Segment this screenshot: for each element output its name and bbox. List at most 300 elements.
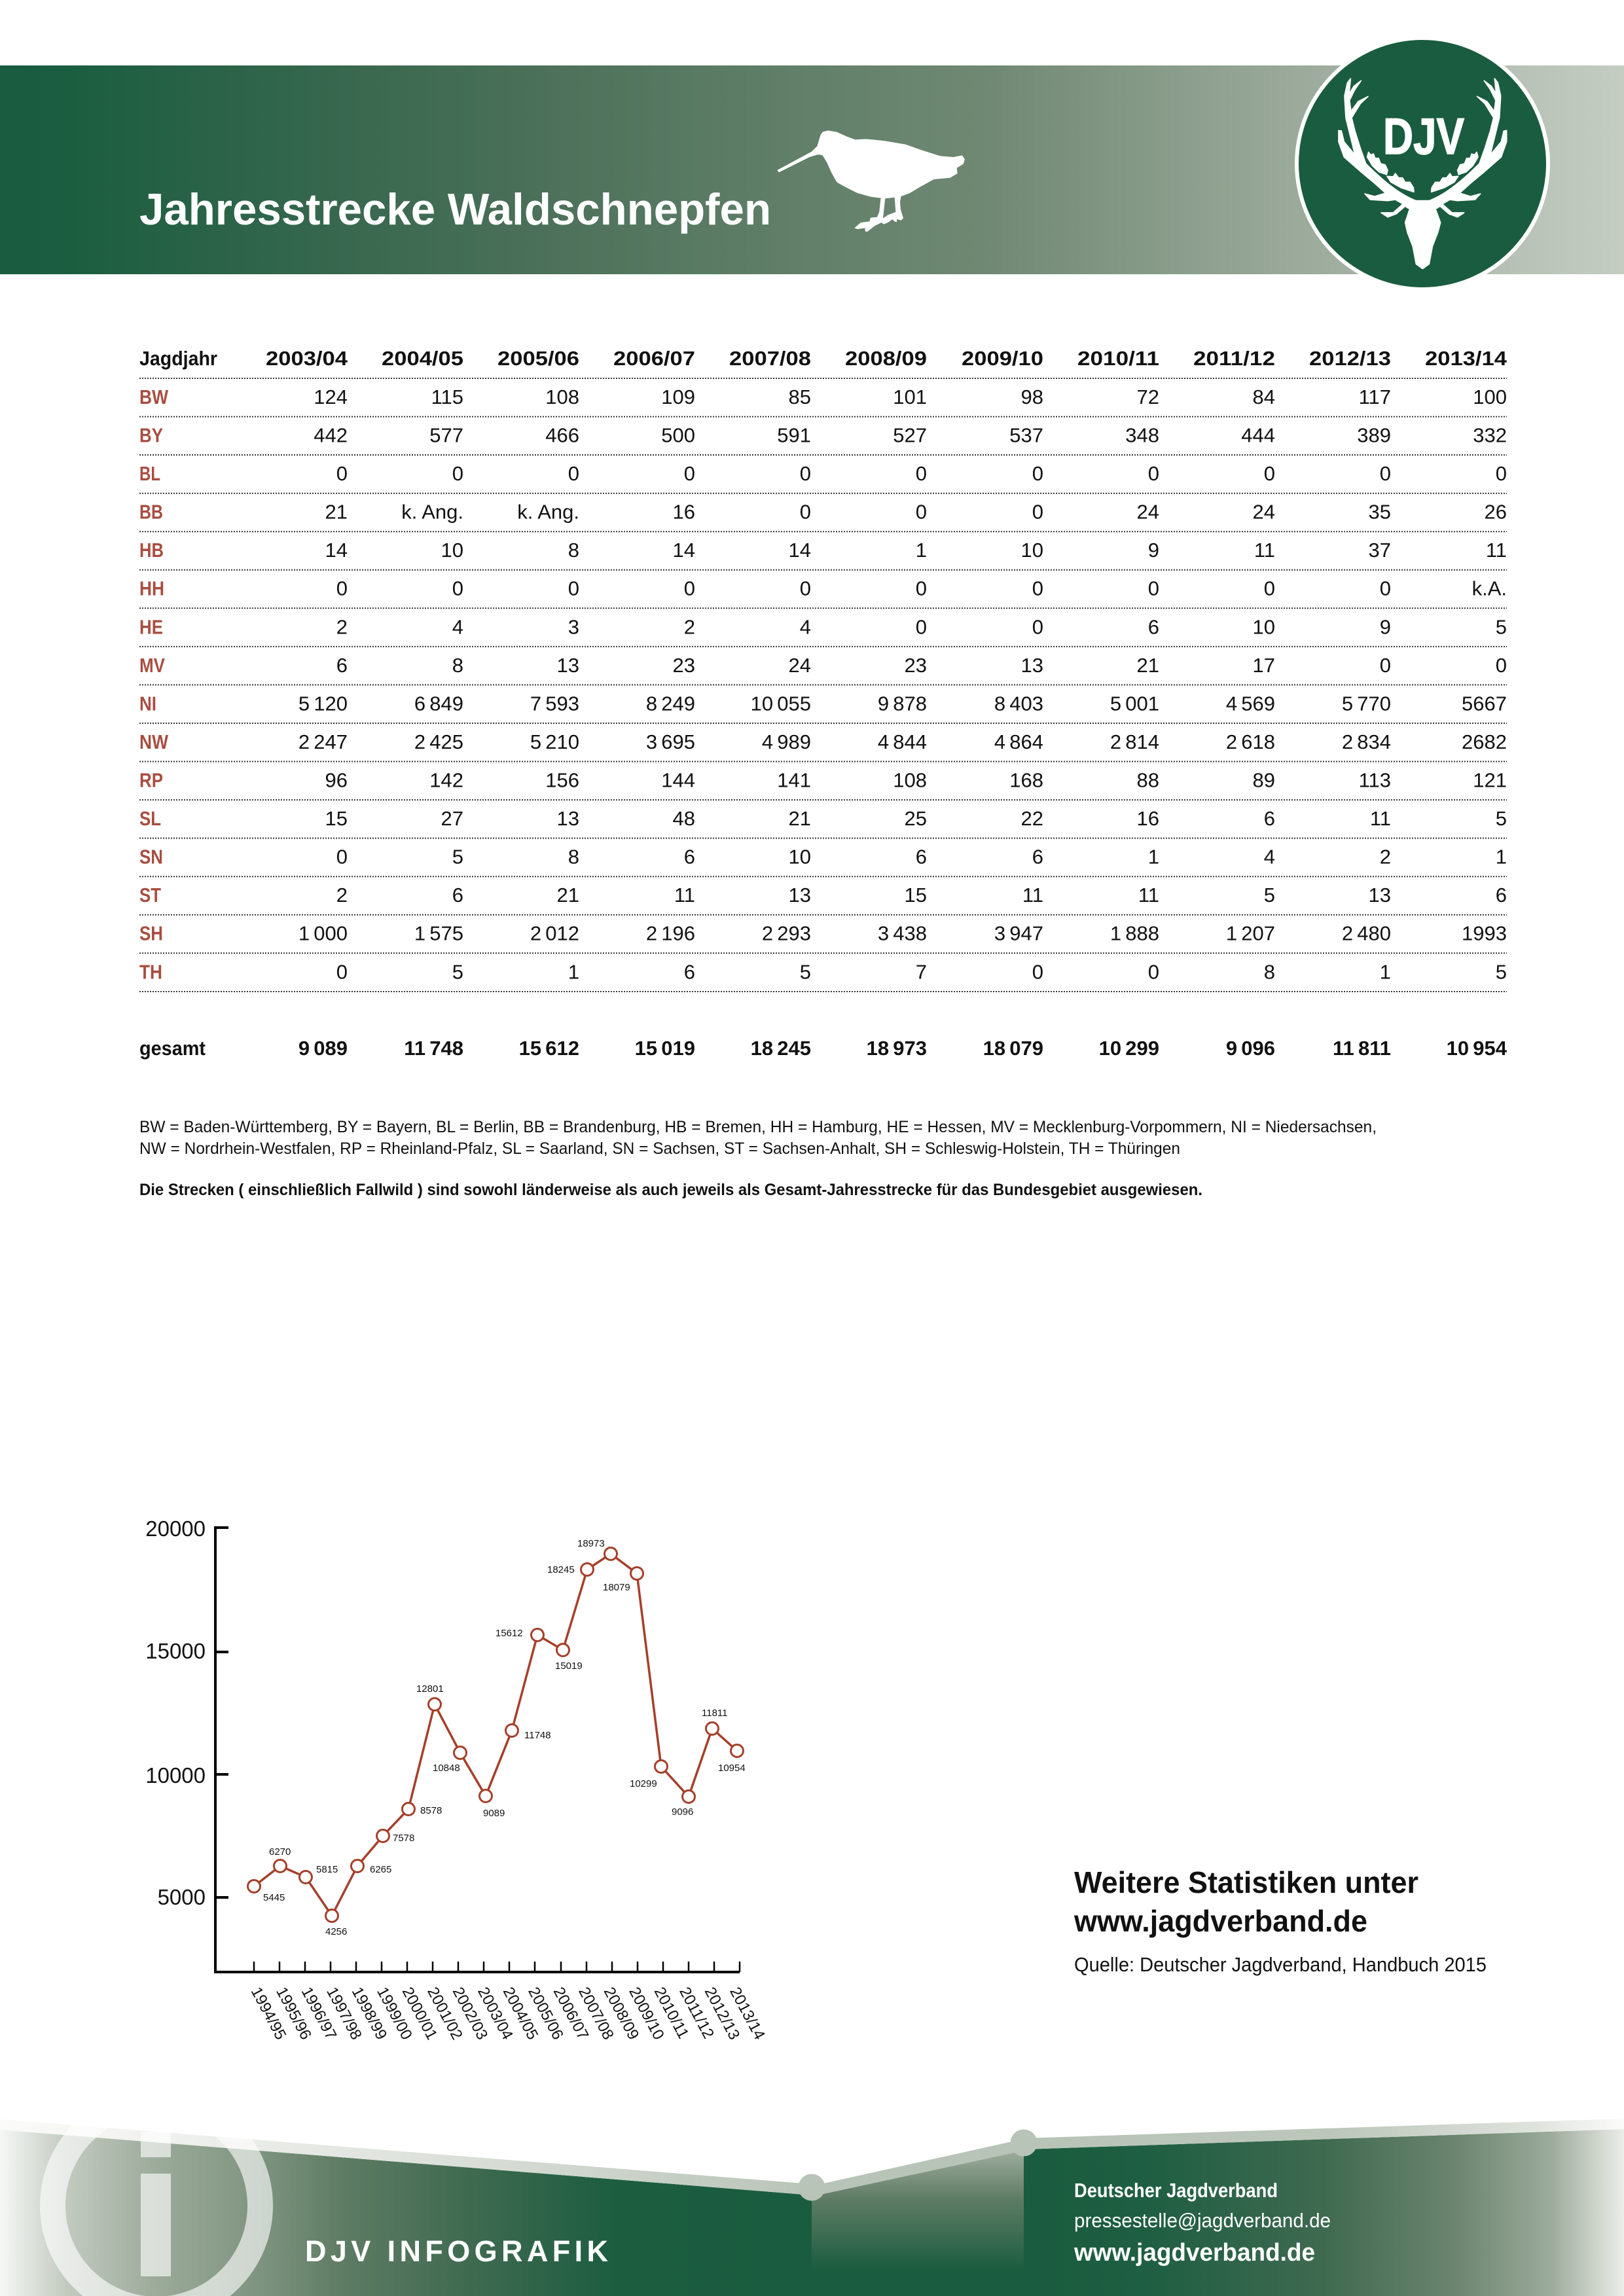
row ST: 5 <box>1264 884 1275 906</box>
further statistics callout: www.jagdverband.de <box>1074 1904 1367 1938</box>
row HH: HH <box>139 577 164 600</box>
row BL: 0 <box>336 462 348 485</box>
footer middle panel <box>812 2150 1024 2296</box>
row HE: 0 <box>1032 615 1043 638</box>
row HH: 0 <box>1264 577 1275 600</box>
table header row: 2012/13 <box>1309 347 1391 370</box>
row RP: 141 <box>777 768 811 792</box>
row SH: 3 438 <box>878 922 927 945</box>
row SL: 13 <box>557 807 579 830</box>
table header row: 2005/06 <box>497 347 579 370</box>
row NI: 9 878 <box>878 692 927 715</box>
chart axes <box>215 1528 740 1972</box>
row HE: 9 <box>1380 615 1391 638</box>
y axis labels: 10000 <box>145 1763 206 1787</box>
row HH: 0 <box>1148 577 1159 600</box>
row TH: 1 <box>568 960 579 983</box>
row NW: 3 695 <box>646 730 695 753</box>
row HH: 0 <box>452 577 463 600</box>
x axis labels: 2004/05 <box>499 1984 541 2043</box>
row BW: 85 <box>789 386 811 408</box>
legend: state abbreviations: BW = Baden-Württemberg, BY = Bayern, BL = Berlin, BB = Brandenburg, HB = Bremen, HH = Hamburg, HE = Hessen, MV = Mecklenburg-Vorpommern, NI = Niedersachsen, <box>139 1118 1377 1136</box>
x axis labels: 2005/06 <box>524 1984 567 2043</box>
row BL: 0 <box>1496 462 1507 485</box>
row HH: 0 <box>1032 577 1043 600</box>
line chart <box>145 1516 768 2043</box>
data value labels: 18079 <box>603 1582 630 1593</box>
x axis labels: 1994/95 <box>247 1984 289 2043</box>
row NW: 4 844 <box>878 730 927 753</box>
row SN: SN <box>139 846 163 869</box>
y axis labels: 15000 <box>145 1639 206 1663</box>
row RP: 89 <box>1253 768 1275 792</box>
row SH: 2 480 <box>1342 922 1391 945</box>
table header row: Jagdjahr <box>139 347 217 370</box>
logo: DJV emblem: DJV <box>1383 107 1464 165</box>
row RP <box>139 768 1507 792</box>
row BW <box>139 386 1507 408</box>
row SN: 6 <box>684 846 695 869</box>
row NW: 2 425 <box>414 730 463 753</box>
table dotted rules <box>139 378 1507 992</box>
row ST: 15 <box>905 884 927 906</box>
row NI: 8 403 <box>994 692 1043 715</box>
further statistics callout <box>1074 1865 1487 1976</box>
row gesamt: 11 748 <box>404 1037 463 1060</box>
row BW: 108 <box>545 386 579 408</box>
row HH: 0 <box>684 577 695 600</box>
row SL: SL <box>139 807 161 830</box>
row MV: MV <box>139 654 165 677</box>
contact block: www.jagdverband.de <box>1074 2239 1315 2267</box>
row NI: 5 120 <box>298 692 348 715</box>
row HE: 2 <box>684 615 695 638</box>
row HE <box>139 615 1507 638</box>
row TH: TH <box>139 960 162 983</box>
data value labels <box>263 1538 746 1937</box>
title: Jahresstrecke Waldschnepfen <box>139 185 771 234</box>
x axis labels: 1998/99 <box>348 1984 390 2043</box>
footer <box>0 2089 1624 2296</box>
row HB: 37 <box>1369 539 1391 562</box>
row HE: 4 <box>800 615 811 638</box>
row RP: 88 <box>1137 768 1159 792</box>
row RP: 121 <box>1473 768 1507 792</box>
row NI: 10 055 <box>751 692 811 715</box>
row SH: 2 196 <box>646 922 695 945</box>
row SH: 1 888 <box>1110 922 1159 945</box>
row HE: 0 <box>916 615 927 638</box>
row SL: 27 <box>441 807 463 830</box>
row SN: 2 <box>1380 846 1391 869</box>
row TH: 5 <box>1496 960 1507 983</box>
row SH <box>139 922 1507 945</box>
header band <box>0 65 1624 274</box>
row BW: 109 <box>661 386 695 408</box>
row SH: 3 947 <box>994 922 1043 945</box>
icon: info symbol <box>40 2089 273 2296</box>
row SL: 25 <box>905 807 927 830</box>
row HE: 4 <box>452 615 463 638</box>
row ST: 11 <box>1138 884 1159 906</box>
row NI: 5 770 <box>1342 692 1391 715</box>
row gesamt: 15 019 <box>635 1037 695 1060</box>
row HH: 0 <box>336 577 348 600</box>
contact block <box>1074 2179 1331 2267</box>
row HE: 10 <box>1253 615 1275 638</box>
row NI: 5667 <box>1462 692 1507 715</box>
legend: state abbreviations: NW = Nordrhein-Westfalen, RP = Rheinland-Pfalz, SL = Saarland, SN = Sachsen, ST = Sachsen-Anhalt, SH = Schleswig-Holstein, TH = Thüringen <box>139 1139 1180 1158</box>
x axis labels: 2007/08 <box>575 1984 617 2043</box>
row SN: 1 <box>1148 846 1159 869</box>
row SL: 6 <box>1264 807 1275 830</box>
row HB: 10 <box>441 539 463 562</box>
row ST: 6 <box>452 884 463 906</box>
row gesamt: 18 973 <box>867 1037 927 1060</box>
row HB: 11 <box>1486 539 1507 562</box>
row HB: 14 <box>789 539 811 562</box>
row BB: 24 <box>1137 501 1159 524</box>
row ST: 21 <box>557 884 579 906</box>
row TH: 5 <box>452 960 463 983</box>
row MV: 0 <box>1496 654 1507 677</box>
row TH: 0 <box>1032 960 1043 983</box>
y axis labels: 5000 <box>158 1885 206 1909</box>
footer right panel <box>1024 2129 1624 2296</box>
logo: DJV emblem <box>1295 36 1550 291</box>
row SH: 1 207 <box>1226 922 1275 945</box>
row gesamt: 9 089 <box>298 1037 348 1060</box>
data value labels: 5445 <box>263 1892 285 1903</box>
row BY: BY <box>139 424 163 446</box>
table header row: 2006/07 <box>613 347 695 370</box>
row SL: 21 <box>789 807 811 830</box>
row BL: 0 <box>1264 462 1275 485</box>
row gesamt: 10 954 <box>1447 1037 1507 1060</box>
row SH: 1993 <box>1462 922 1507 945</box>
row HE: 6 <box>1148 615 1159 638</box>
row BW: 84 <box>1253 386 1275 408</box>
row HE: 5 <box>1496 615 1507 638</box>
data value labels: 10954 <box>718 1763 746 1774</box>
row BW: BW <box>139 386 169 408</box>
x axis labels: 2012/13 <box>701 1984 743 2043</box>
row HH: 0 <box>800 577 811 600</box>
row HB: 14 <box>673 539 695 562</box>
icon: woodcock silhouette <box>777 130 965 232</box>
row BL: 0 <box>568 462 579 485</box>
row BB: k. Ang. <box>401 501 463 524</box>
row SN <box>139 846 1507 869</box>
row MV: 17 <box>1253 654 1275 677</box>
row MV: 13 <box>557 654 579 677</box>
row BB: 0 <box>1032 501 1043 524</box>
row MV: 6 <box>336 654 348 677</box>
row HB: 8 <box>568 539 579 562</box>
row BB: 21 <box>325 501 348 524</box>
row BB: 26 <box>1485 501 1507 524</box>
row NI: 6 849 <box>414 692 463 715</box>
row SL: 15 <box>325 807 348 830</box>
data markers <box>247 1547 744 1922</box>
row HH: k.A. <box>1472 577 1507 600</box>
x axis labels: 2006/07 <box>550 1984 592 2043</box>
table header row: 2013/14 <box>1425 347 1507 370</box>
row BB: 0 <box>800 501 811 524</box>
row SN: 6 <box>916 846 927 869</box>
row RP: 113 <box>1359 768 1391 792</box>
row BY: 500 <box>661 424 695 446</box>
data value labels: 8578 <box>420 1805 442 1816</box>
x axis labels: 1997/98 <box>323 1984 365 2043</box>
row SN: 0 <box>336 846 348 869</box>
row SL: 22 <box>1021 807 1043 830</box>
contact block: Deutscher Jagdverband <box>1074 2179 1278 2202</box>
row MV: 23 <box>673 654 695 677</box>
row BL: BL <box>139 462 160 485</box>
row BL: 0 <box>1380 462 1391 485</box>
legend: state abbreviations <box>139 1118 1377 1158</box>
row HH: 0 <box>1380 577 1391 600</box>
data line <box>254 1554 737 1916</box>
data value labels: 12801 <box>416 1683 444 1695</box>
row BY: 442 <box>314 424 348 446</box>
row SL <box>139 807 1507 830</box>
row NW <box>139 730 1507 753</box>
table header row: 2010/11 <box>1077 347 1159 370</box>
data value labels: 9096 <box>672 1806 693 1818</box>
row SL: 11 <box>1370 807 1391 830</box>
row BW: 100 <box>1473 386 1507 408</box>
row SH: SH <box>139 922 163 945</box>
row MV: 0 <box>1380 654 1391 677</box>
table header row: 2007/08 <box>729 347 811 370</box>
row BL: 0 <box>452 462 463 485</box>
row NW: 2 618 <box>1226 730 1275 753</box>
footer left panel <box>0 2130 812 2296</box>
row BY: 466 <box>545 424 579 446</box>
row HE: 2 <box>336 615 348 638</box>
data value labels: 9089 <box>483 1808 505 1819</box>
row NW: NW <box>139 730 169 753</box>
row HE: 3 <box>568 615 579 638</box>
row SL: 48 <box>673 807 695 830</box>
row MV: 13 <box>1021 654 1043 677</box>
row SN: 10 <box>789 846 811 869</box>
row BY: 348 <box>1125 424 1159 446</box>
row NW: 4 989 <box>762 730 811 753</box>
data value labels: 11748 <box>524 1730 551 1741</box>
row TH: 8 <box>1264 960 1275 983</box>
x axis labels: 2010/11 <box>651 1984 692 2041</box>
row NW: 2682 <box>1462 730 1507 753</box>
row RP: 96 <box>325 768 348 792</box>
x axis labels: 2011/12 <box>676 1984 717 2041</box>
row NI <box>139 692 1507 715</box>
row MV <box>139 654 1507 677</box>
row BL: 0 <box>684 462 695 485</box>
data value labels: 11811 <box>702 1708 728 1719</box>
row TH: 0 <box>336 960 348 983</box>
row ST <box>139 884 1507 906</box>
row BL: 0 <box>916 462 927 485</box>
row RP: 144 <box>661 768 695 792</box>
table header row <box>139 347 1507 370</box>
y axis labels: 20000 <box>145 1516 206 1541</box>
row ST: 13 <box>789 884 811 906</box>
row SH: 2 012 <box>530 922 579 945</box>
table header row: 2004/05 <box>382 347 463 370</box>
row BL: 0 <box>1032 462 1043 485</box>
row HE: HE <box>139 615 163 638</box>
row SN: 1 <box>1496 846 1507 869</box>
footer label: DJV INFOGRAFIK <box>305 2234 609 2268</box>
row BY: 527 <box>893 424 927 446</box>
x axis labels: 1999/00 <box>373 1984 416 2043</box>
x axis labels <box>247 1984 768 2043</box>
data value labels: 5815 <box>316 1864 338 1875</box>
row HB: 14 <box>325 539 348 562</box>
row MV: 21 <box>1137 654 1159 677</box>
row SH: 1 000 <box>298 922 348 945</box>
x axis labels: 2009/10 <box>625 1984 668 2043</box>
table header row: 2011/12 <box>1193 347 1275 370</box>
row BB <box>139 501 1507 524</box>
row gesamt: 15 612 <box>519 1037 579 1060</box>
row SH: 1 575 <box>414 922 463 945</box>
y axis labels <box>145 1516 206 1909</box>
row NI: 5 001 <box>1110 692 1159 715</box>
row HB: 10 <box>1021 539 1043 562</box>
footer ribbon <box>0 2119 1624 2200</box>
row SN: 8 <box>568 846 579 869</box>
x axis labels: 2008/09 <box>600 1984 642 2043</box>
row TH: 5 <box>800 960 811 983</box>
row NW: 2 814 <box>1110 730 1159 753</box>
x tick marks <box>254 1962 740 1972</box>
data value labels: 10848 <box>433 1763 460 1774</box>
x axis labels: 1996/97 <box>298 1984 340 2043</box>
row NI: 8 249 <box>646 692 695 715</box>
row BW: 117 <box>1359 386 1391 408</box>
x axis labels: 2013/14 <box>726 1984 768 2043</box>
row gesamt: 9 096 <box>1226 1037 1275 1060</box>
row ST: 11 <box>1022 884 1043 906</box>
row gesamt: gesamt <box>139 1037 206 1060</box>
data table <box>139 347 1507 1060</box>
row SN: 5 <box>452 846 463 869</box>
row gesamt: 18 079 <box>983 1037 1043 1060</box>
row RP: 108 <box>893 768 927 792</box>
further statistics callout: Quelle: Deutscher Jagdverband, Handbuch 2015 <box>1074 1953 1487 1976</box>
row BY <box>139 424 1507 446</box>
row BL: 0 <box>800 462 811 485</box>
row SH: 2 293 <box>762 922 811 945</box>
row BY: 444 <box>1241 424 1275 446</box>
row RP: RP <box>139 768 163 792</box>
row BW: 115 <box>431 386 463 408</box>
row MV: 23 <box>905 654 927 677</box>
further statistics callout: Weitere Statistiken unter <box>1074 1865 1418 1899</box>
row BY: 591 <box>777 424 811 446</box>
row ST: 13 <box>1369 884 1391 906</box>
row BB: 35 <box>1369 501 1391 524</box>
row BL: 0 <box>1148 462 1159 485</box>
table header row: 2003/04 <box>266 347 348 370</box>
row BB: 16 <box>673 501 695 524</box>
row BY: 332 <box>1473 424 1507 446</box>
row TH: 6 <box>684 960 695 983</box>
contact block: pressestelle@jagdverband.de <box>1074 2209 1331 2232</box>
data value labels: 6270 <box>269 1846 291 1857</box>
row NI: 4 569 <box>1226 692 1275 715</box>
row SN: 4 <box>1264 846 1275 869</box>
row HH <box>139 577 1507 600</box>
row ST: ST <box>139 884 161 906</box>
row HH: 0 <box>568 577 579 600</box>
row BB: 0 <box>916 501 927 524</box>
row SL: 5 <box>1496 807 1507 830</box>
row RP: 168 <box>1009 768 1043 792</box>
data value labels: 18245 <box>547 1564 575 1575</box>
data value labels: 18973 <box>577 1538 605 1549</box>
x axis labels: 2000/01 <box>399 1984 441 2043</box>
x axis labels: 2003/04 <box>474 1984 516 2043</box>
row BL <box>139 462 1507 485</box>
row BY: 577 <box>429 424 463 446</box>
table header row: 2008/09 <box>845 347 927 370</box>
x axis labels: 2002/03 <box>449 1984 491 2043</box>
row RP: 156 <box>545 768 579 792</box>
row BW: 124 <box>314 386 348 408</box>
row ST: 11 <box>674 884 695 906</box>
row BY: 389 <box>1357 424 1391 446</box>
row SN: 6 <box>1032 846 1043 869</box>
row ST: 6 <box>1496 884 1507 906</box>
row BW: 72 <box>1137 386 1159 408</box>
row ST: 2 <box>336 884 348 906</box>
row HB: HB <box>139 539 164 562</box>
note text: Die Strecken ( einschließlich Fallwild ) sind sowohl länderweise als auch jeweils als Gesamt-Jahresstrecke für das Bundesgebiet ausgewiesen. <box>139 1181 1202 1199</box>
row RP: 142 <box>429 768 463 792</box>
data value labels: 15612 <box>496 1628 523 1639</box>
data value labels: 7578 <box>393 1833 414 1844</box>
data value labels: 15019 <box>555 1660 583 1672</box>
row NW: 5 210 <box>530 730 579 753</box>
row BB: k. Ang. <box>517 501 579 524</box>
row HB: 11 <box>1254 539 1275 562</box>
row NI: 7 593 <box>530 692 579 715</box>
row NW: 2 247 <box>298 730 348 753</box>
row SL: 16 <box>1137 807 1159 830</box>
row HB: 9 <box>1148 539 1159 562</box>
row MV: 8 <box>452 654 463 677</box>
row TH: 0 <box>1148 960 1159 983</box>
table header row: 2009/10 <box>962 347 1043 370</box>
data value labels: 10299 <box>630 1778 657 1789</box>
row MV: 24 <box>789 654 811 677</box>
row BB: BB <box>139 501 163 524</box>
row BW: 101 <box>893 386 927 408</box>
row TH <box>139 960 1507 983</box>
row HB <box>139 539 1507 562</box>
x axis labels: 2001/02 <box>424 1984 466 2043</box>
row HB: 1 <box>916 539 927 562</box>
row BB: 24 <box>1253 501 1275 524</box>
row TH: 1 <box>1380 960 1391 983</box>
row BW: 98 <box>1021 386 1043 408</box>
row gesamt: 18 245 <box>751 1037 811 1060</box>
